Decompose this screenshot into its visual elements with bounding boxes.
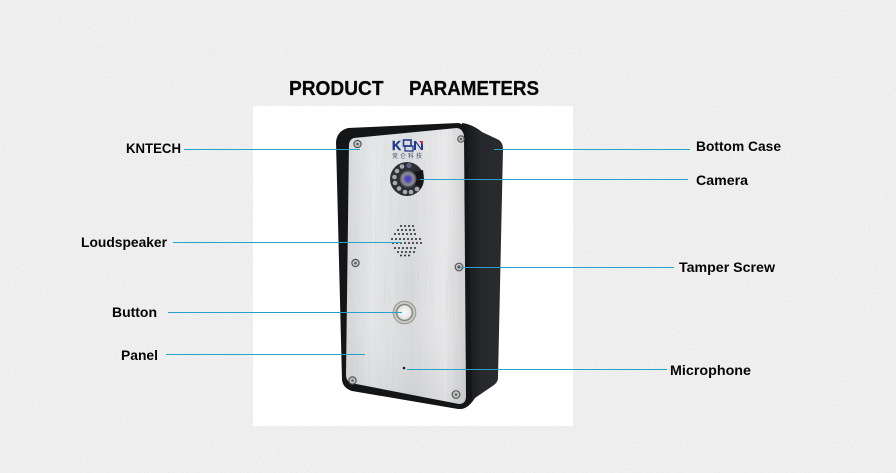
label: Loudspeaker: Loudspeaker [81,234,168,250]
KNTECH logo [392,139,423,160]
microphone hole [403,367,405,369]
front bezel [336,123,472,409]
title: PARAMETERS [409,78,539,100]
title: PRODUCT [289,78,384,100]
label: Panel: Panel [121,347,158,363]
KNTECH logo: K [392,139,401,153]
callout lines [166,149,690,370]
label: Microphone: Microphone [670,362,751,378]
steel panel [344,124,468,408]
label: Button: Button [112,304,157,320]
loudspeaker grille [391,225,422,256]
corner and tamper screws [349,136,464,398]
label: Tamper Screw: Tamper Screw [679,259,775,275]
label: KNTECH: KNTECH [126,140,181,156]
label: Camera: Camera [696,172,748,188]
device: door intercom [336,123,503,409]
KNTECH logo: 竞 仑 科 技 [392,152,422,160]
title [289,78,539,100]
label: Bottom Case: Bottom Case [696,138,781,154]
rear case [460,123,503,409]
camera [390,162,424,196]
panel: product photo backdrop [253,106,573,426]
call button [393,301,416,324]
